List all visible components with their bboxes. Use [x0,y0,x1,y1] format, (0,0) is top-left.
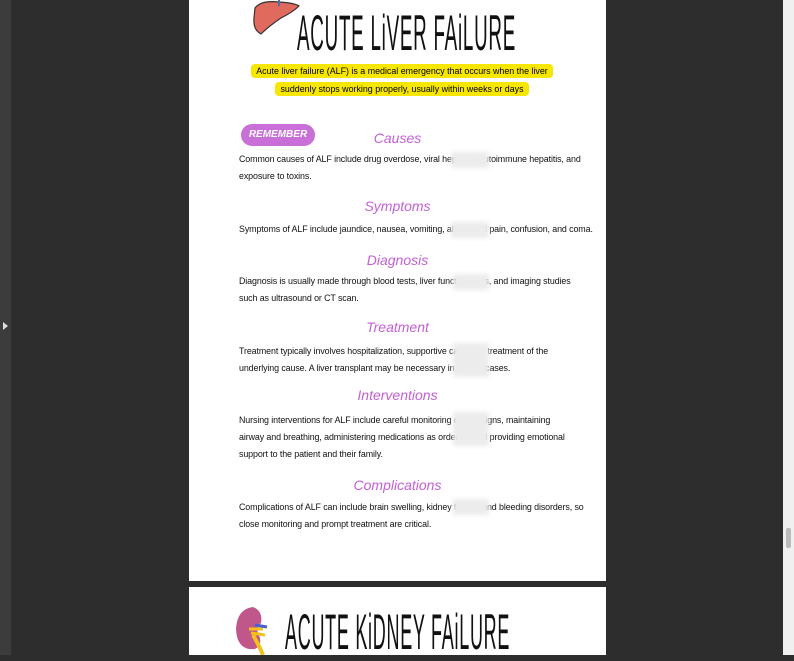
icon: kidney [236,607,268,655]
page 1: acute liver failure [189,0,606,581]
title: ACUTE KiDNEY FAiLURE [285,604,510,660]
heading: complications: Complications [354,477,441,493]
scrollbar [783,0,794,655]
heading: symptoms: Symptoms [364,198,431,214]
text: diagnosis: Diagnosis is usually made through blood tests, liver function tests, and imaging studies such as ultrasound or CT scan. [239,276,571,303]
icon: liver [253,0,300,35]
text: complications: Complications of ALF can include brain swelling, kidney failure, and bleeding disorders, so close monitoring and prompt treatment are critical. [239,502,584,529]
heading: causes: Causes [374,130,421,146]
heading: treatment: Treatment [366,319,429,335]
badge: remember [241,124,315,146]
intro highlight: Acute liver failure (ALF) is a medical emergency that occurs when the liver suddenly stops working properly, usually within weeks or days [256,66,548,94]
heading: diagnosis: Diagnosis [367,252,428,268]
text: interventions: Nursing interventions for ALF include careful monitoring of vital signs, maintaining airway and breathing, administering medications as ordered, and providing emotional support to the patient and their family. [239,415,565,459]
text: causes: Common causes of ALF include drug overdose, viral hepatitis, autoimmune hepatitis, and exposure to toxins. [239,154,581,181]
page 2: acute kidney failure [189,587,606,655]
left sidebar [0,0,11,655]
heading: interventions: Interventions [357,387,438,403]
text: symptoms: Symptoms of ALF include jaundice, nausea, vomiting, abdominal pain, confusion, and coma. [239,224,593,234]
badge: remember: REMEMBER [249,129,307,140]
title: ACUTE LiVER FAiLURE [297,5,516,61]
text: treatment: Treatment typically involves hospitalization, supportive care, and treatment of the underlying cause. A liver transplant may be necessary in severe cases. [239,346,548,373]
